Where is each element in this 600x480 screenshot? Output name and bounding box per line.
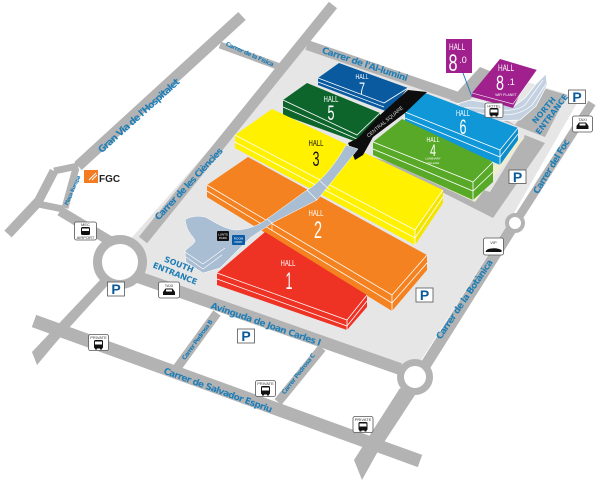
parking icons [108, 89, 586, 344]
street labels: Carrer de l'Al-lumini [320, 46, 409, 84]
icon: shuttle bus centre [256, 380, 276, 396]
hall 3: 3 [312, 148, 320, 171]
hall 8.1: .1 [507, 77, 515, 87]
street labels: Carrer de la Botànica [435, 258, 496, 342]
parking icons: P [572, 89, 582, 105]
hall 5 [283, 83, 380, 142]
street labels: ENTRANCE [151, 261, 198, 287]
icon: taxi south [158, 282, 180, 298]
hall 5: 5 [328, 102, 334, 125]
small sign: blue [232, 235, 245, 245]
icon: taxi south: TAXI [165, 283, 173, 288]
sign: hall 8.0: HALL [449, 42, 465, 52]
hall 5: HALL [324, 95, 339, 104]
parking icons: P [111, 281, 121, 297]
hall 2 [207, 157, 427, 311]
small sign: blue: PARK [235, 240, 242, 244]
hall 6 [405, 93, 518, 165]
north walkway [457, 74, 547, 121]
parking icons: P [420, 287, 429, 303]
hall 8.1: HALL [498, 63, 514, 73]
hall 3 [235, 109, 443, 245]
hall 4 [373, 119, 493, 200]
roundabouts [98, 215, 523, 392]
parking icons: P [241, 328, 251, 344]
parking and service areas [373, 67, 567, 218]
site ground [128, 45, 580, 368]
hall 4: HALL [426, 137, 440, 144]
black central square walkway: CENTRAL SQUARE [366, 105, 405, 139]
hall 7: HALL [356, 74, 369, 81]
hall 8.1: 8 [496, 72, 504, 95]
street labels: Carrer del Foc [532, 138, 573, 196]
hall 1 [217, 232, 367, 330]
hall 7 [318, 63, 408, 112]
sign: hall 8.0: 8 [448, 50, 458, 77]
street labels: SOUTH [163, 255, 195, 275]
icon: shuttle bus centre: PRIVATE [257, 381, 274, 386]
small sign: black: LUNTS [218, 232, 228, 236]
blue walkway and fan [185, 145, 358, 273]
sign: hall 8.0: .0 [459, 55, 467, 65]
icon: taxi north [572, 116, 592, 132]
hall 2 label [308, 209, 324, 244]
icon: shuttle bus west: PRIVATE [90, 335, 107, 340]
sign: hall 8.0 [446, 39, 472, 97]
street labels: Carrer de Salvador Espriu [162, 367, 273, 415]
hall 2 label: HALL [308, 209, 324, 218]
hall 6: HALL [456, 109, 470, 118]
hall 6: 6 [460, 116, 466, 139]
street labels [64, 41, 573, 415]
icon: shuttle bus west [88, 334, 108, 350]
hall 4: 4 [430, 141, 436, 160]
icon: hotel bus: HOTEL [487, 104, 501, 108]
icon: airport bus: AIRPORT [77, 235, 95, 240]
street labels: ENTRANCE [534, 93, 570, 136]
FGC logo [84, 170, 120, 185]
street labels: Gran Via de l'Hospitalet [96, 76, 183, 156]
street labels: Carrer de la Física [224, 41, 275, 68]
icon: VIP car: VIP [490, 240, 497, 245]
black central square walkway [348, 90, 427, 160]
street labels: Carrer de les Ciències [153, 146, 226, 223]
small sign: black [217, 231, 229, 241]
hall 2 label: 2 [314, 217, 322, 244]
hall 8.1: WiFi PLANET [495, 93, 518, 97]
FGC logo: FGC [99, 174, 120, 185]
cream base under halls 4 and 6 [374, 137, 525, 202]
hall 1: HALL [280, 259, 296, 268]
hall 7: 7 [359, 79, 365, 98]
street labels: Carrer Pedrosa C [281, 352, 317, 396]
hall 4: VILLAGE [427, 161, 439, 165]
hall 3: HALL [308, 139, 324, 148]
street labels: NORTH [530, 95, 558, 126]
small sign: blue: ROOM [234, 236, 244, 240]
hall 1: 1 [286, 268, 292, 295]
icon: taxi north: TAXI [578, 117, 587, 122]
parking icons: P [513, 169, 522, 185]
icon: airport bus [74, 222, 96, 240]
icon: VIP car [484, 238, 504, 255]
icon: shuttle bus east: PRIVATE [355, 417, 372, 422]
hall 8.1 [472, 59, 537, 108]
icon: hotel bus [485, 103, 503, 118]
street labels: Avinguda de Joan Carles I [209, 301, 322, 349]
small sign: black: PARK [219, 236, 227, 240]
street labels: Plaça Europa [64, 175, 82, 206]
icon: shuttle bus east [353, 416, 373, 432]
icon: airport bus: MEC [81, 222, 90, 227]
street labels: Carrer Pedrosa B [181, 318, 215, 362]
hall 4: LUMINARY [425, 156, 441, 160]
